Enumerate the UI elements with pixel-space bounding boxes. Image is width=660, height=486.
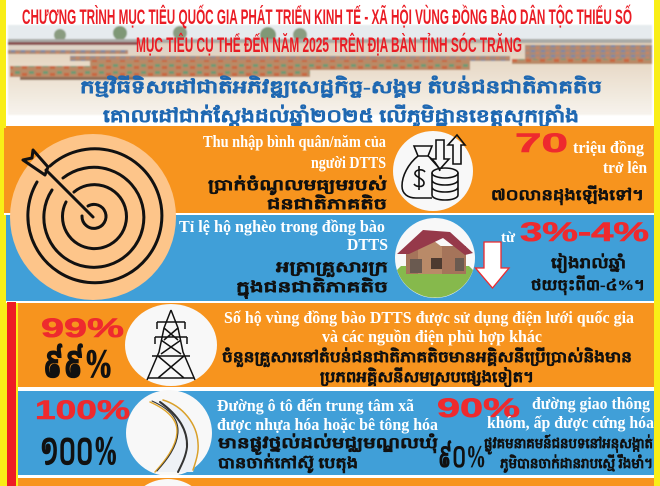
panel: income row bbox=[4, 128, 654, 215]
icon: road bbox=[126, 390, 212, 476]
road label: មានផ្លូវថ្នល់ដល់មជ្ឈមណ្ឌលឃុំ bbox=[218, 433, 438, 455]
electricity label: và các nguồn điện phù hợp khác bbox=[322, 327, 542, 346]
title: Khmer: គោលដៅជាក់ស្តែងដល់ឆ្នាំ២០២៥ លើភូមិដ្ឋានខេត្តសុកត្រាំង bbox=[103, 104, 579, 129]
70 million value bbox=[491, 128, 647, 206]
90 percent value: ភូមិបានចាក់ដានរាបស្មើ រឹងមាំ។ bbox=[500, 454, 653, 473]
70 million value: 70 bbox=[515, 128, 568, 158]
70 million value: trở lên bbox=[603, 158, 647, 177]
99 percent value: 99% bbox=[41, 313, 124, 343]
electricity label: ចំនួនគ្រួសារនៅតំបន់ជនជាតិភាគតិចមានអគ្គិសនីប្រើប្រាស់និងមាន bbox=[222, 347, 632, 368]
90 percent value: ផ្លូវគមនាគមន៍ជនបទនៅអនុសង្កាត់ bbox=[484, 434, 653, 455]
icon: target with arrow bbox=[10, 134, 176, 300]
70 million value: ៧០លានដុងឡើងទៅ។ bbox=[491, 185, 644, 206]
99 percent value bbox=[41, 313, 124, 386]
red side bar bbox=[7, 302, 16, 486]
panel: electricity row bbox=[18, 303, 654, 388]
electricity label: Số hộ vùng đồng bào DTTS được sử dụng điện lưới quốc gia bbox=[224, 308, 634, 327]
100 percent value: ១០០% bbox=[40, 428, 118, 473]
3-4 percent value: ថយចុះពី៣-៤%។ bbox=[531, 275, 645, 296]
panel: poverty row bbox=[6, 215, 654, 303]
panel: next row, cropped bbox=[18, 478, 654, 486]
income label: ជនជាតិភាគតិច bbox=[267, 194, 387, 213]
icon: old wooden house bbox=[395, 218, 475, 298]
road label: được nhựa hóa hoặc bê tông hóa bbox=[217, 415, 438, 434]
title: Vietnamese bbox=[22, 5, 632, 57]
poverty label: Tỉ lệ hộ nghèo trong đồng bào bbox=[179, 217, 385, 236]
3-4 percent value: 3%-4% bbox=[520, 217, 649, 247]
3-4 percent value: từ bbox=[501, 230, 516, 246]
90 percent value bbox=[437, 393, 654, 474]
3-4 percent value: រៀងរាល់ឆ្នាំ bbox=[551, 253, 626, 274]
title: Khmer: កម្មវិធីទិសដៅជាតិអភិវឌ្ឍសេដ្ឋកិច្ច-សង្គម តំបន់ជនជាតិភាគតិច bbox=[80, 75, 602, 98]
income label: người DTTS bbox=[311, 153, 386, 172]
header photo: boat race bbox=[8, 25, 652, 115]
99 percent value: ៩៩% bbox=[43, 341, 113, 386]
icon: money bag and coins bbox=[393, 131, 473, 211]
road label: Đường ô tô đến trung tâm xã bbox=[217, 396, 414, 415]
90 percent value: 90% bbox=[437, 393, 520, 423]
100 percent value bbox=[35, 395, 130, 473]
electricity label bbox=[222, 308, 634, 388]
100 percent value: 100% bbox=[35, 395, 130, 425]
90 percent value: ៩០% bbox=[438, 438, 486, 474]
header panel bbox=[6, 0, 654, 129]
70 million value: triệu đồng bbox=[573, 138, 644, 157]
electricity label: ប្រភពអគ្គិសនីសមស្របផ្សេងទៀត។ bbox=[320, 367, 534, 388]
income label bbox=[203, 132, 387, 213]
panel: roads row bbox=[18, 390, 654, 476]
title: Khmer bbox=[80, 75, 602, 129]
poverty label: អត្រាគ្រួសារក្រ bbox=[276, 260, 388, 278]
income label: ប្រាក់ចំណូលមធ្យមរបស់ bbox=[208, 175, 387, 196]
arrow: decrease bbox=[476, 242, 509, 288]
road label bbox=[217, 396, 438, 474]
poverty label: ក្នុងជនជាតិភាគតិច bbox=[236, 277, 388, 299]
90 percent value: đường giao thông bbox=[532, 394, 650, 413]
icon: power pylon bbox=[125, 304, 217, 386]
poverty label bbox=[179, 217, 388, 299]
road label: បានចាក់កៅស៊ូ បេតុង bbox=[218, 453, 358, 474]
income label: Thu nhập bình quân/năm của bbox=[203, 132, 386, 151]
3-4 percent value bbox=[501, 217, 649, 296]
poverty label: DTTS bbox=[347, 235, 388, 254]
